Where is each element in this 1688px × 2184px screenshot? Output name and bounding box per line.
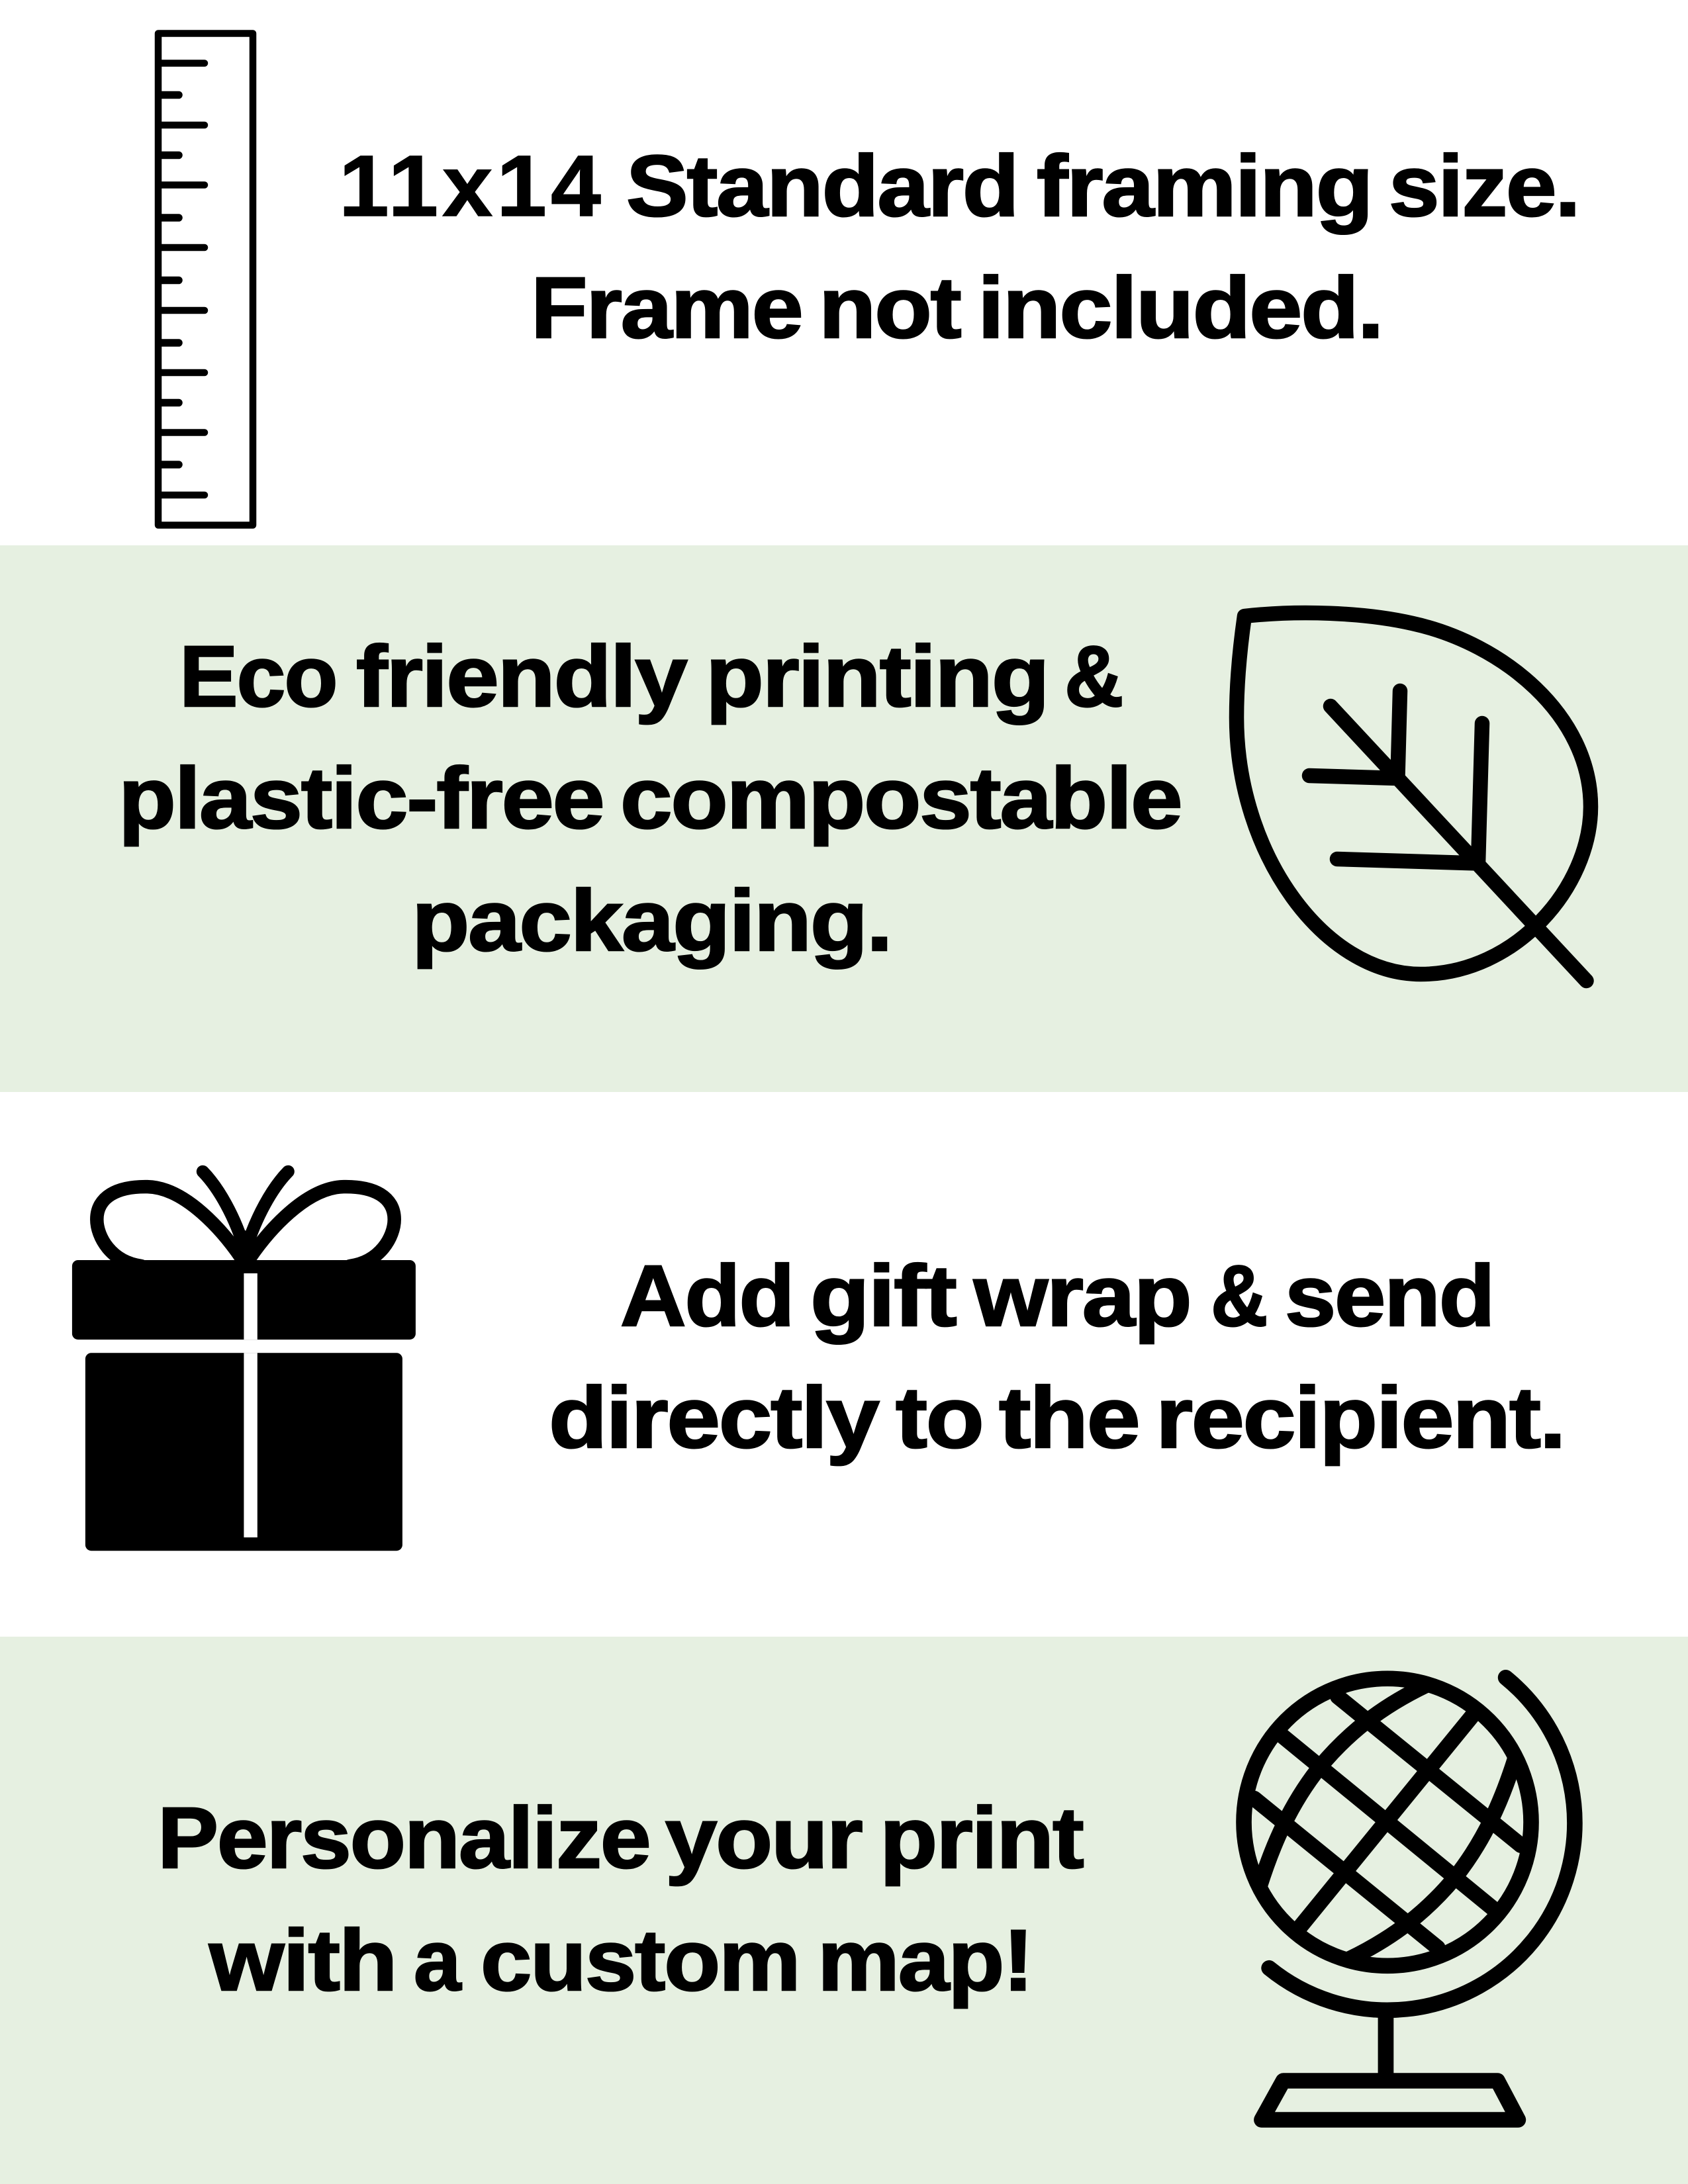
text: eco friendly: packaging. (412, 872, 891, 969)
icon: leaf (1237, 613, 1591, 981)
text: gift wrap: Add (620, 1247, 793, 1344)
text: gift wrap: to (896, 1369, 982, 1466)
text: custom map: your (665, 1789, 862, 1886)
panel: eco friendly (0, 545, 1688, 1092)
text: eco friendly: & (1064, 627, 1123, 725)
text: eco friendly: friendly (356, 627, 688, 725)
text: custom map: a (414, 1911, 462, 2009)
text: custom map: custom (481, 1911, 800, 2009)
text: eco friendly (118, 627, 1181, 969)
text: gift wrap: directly (549, 1369, 880, 1466)
text: framing size: not (819, 259, 961, 356)
text: framing size: included. (978, 259, 1382, 356)
text: custom map: print (880, 1789, 1084, 1886)
text: gift wrap: gift (810, 1247, 957, 1344)
text: framing size: Frame (531, 259, 802, 356)
text: gift wrap: the (999, 1369, 1139, 1466)
text: eco friendly: Eco (179, 627, 336, 725)
text: framing size (339, 137, 1579, 356)
text: gift wrap: recipient. (1156, 1369, 1565, 1466)
text: eco friendly: plastic-free (118, 749, 604, 846)
text: eco friendly: compostable (620, 749, 1181, 846)
icon: globe (1244, 1678, 1575, 2120)
icon: gift box (72, 1171, 416, 1551)
text: gift wrap (549, 1247, 1565, 1466)
text: framing size: size. (1389, 137, 1579, 234)
text: framing size: Standard (626, 137, 1018, 234)
text: custom map (158, 1789, 1084, 2009)
text: framing size: framing (1037, 137, 1372, 234)
icon: ruler (158, 33, 253, 525)
text: custom map: map! (818, 1911, 1033, 2009)
panel: gift wrap (0, 1092, 1688, 1637)
text: framing size: 11x14 (339, 137, 605, 234)
text: custom map: with (209, 1911, 396, 2009)
panel: framing size (0, 0, 1688, 545)
text: gift wrap: send (1285, 1247, 1493, 1344)
text: eco friendly: printing (706, 627, 1049, 725)
text: custom map: Personalize (158, 1789, 650, 1886)
panel: custom map (0, 1637, 1688, 2184)
text: gift wrap: & (1211, 1247, 1267, 1344)
text: gift wrap: wrap (973, 1247, 1190, 1344)
